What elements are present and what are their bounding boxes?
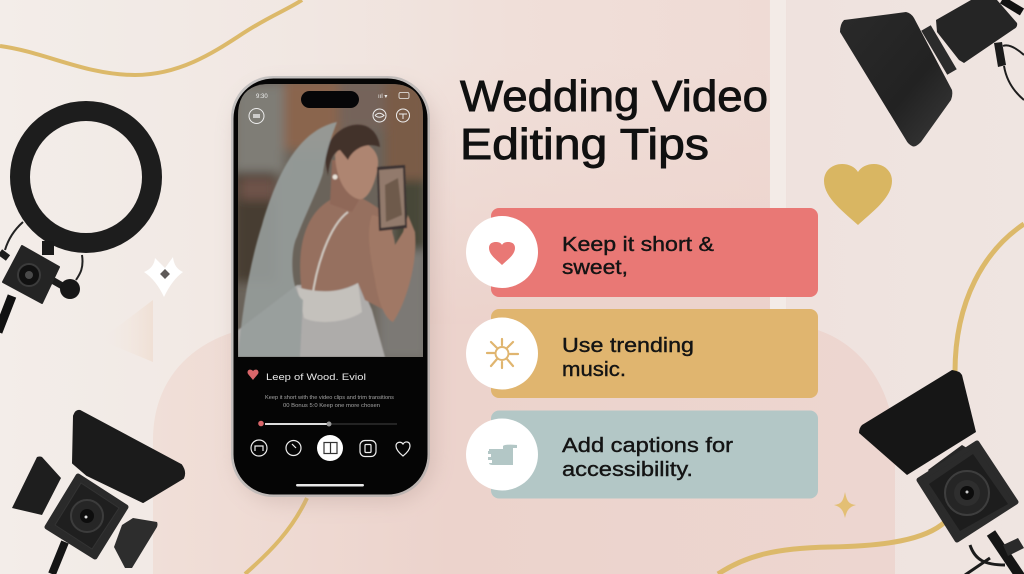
light with barn doors: bottom right [859,370,1024,574]
photo overlay buttons [249,108,410,124]
gold curve: bottom center [245,498,307,574]
phone body [231,76,430,497]
veil [238,122,337,357]
tip text [562,434,733,481]
lace bodice [297,283,362,322]
tip text: Use trending [562,334,694,357]
ring light [0,111,152,332]
light with barn doors: bottom left [12,411,184,574]
home indicator [296,484,364,486]
dress skirt [238,283,385,357]
progress bar [258,421,397,426]
app caption: 00 Bonus 5:0 Keep one more chosen [283,403,380,409]
app caption [248,370,395,409]
tip 1: keep it short [466,208,818,297]
phone [231,76,434,502]
icon: gold heart [824,164,892,225]
title: Wedding Video [460,72,768,121]
status bar [256,92,409,100]
tip text: music. [562,358,626,381]
tip text: Keep it short & [562,233,714,256]
tip text: accessibility. [562,458,693,481]
title [460,72,768,169]
dynamic island [301,91,359,108]
raised arm [369,215,415,322]
tip text: sweet, [562,256,628,279]
dress strap [312,212,348,300]
light with barn doors: top right [840,0,1024,146]
playback controls [251,435,410,461]
gold curve: bottom right [718,522,945,574]
icon: heart [466,216,538,288]
hair [326,125,380,176]
tip 3: captions [466,410,818,498]
back and shoulder [300,190,392,312]
icon: sun [466,318,538,390]
gold curve: top left [0,0,302,75]
app caption: Keep it short with the video clips and trim transitions [265,395,395,401]
icon: hand [466,418,538,490]
title: Editing Tips [460,120,709,169]
phone photo: bride [234,80,428,360]
app caption: Leep of Wood. Eviol [266,372,366,383]
status bar: 9:30 [256,94,268,100]
status bar: ııl ▾ [378,94,387,100]
tip text [562,233,714,279]
tip text [562,334,694,381]
icon: gold star [834,492,856,518]
neck and face [330,160,346,200]
held phone [377,165,407,231]
gold curve: right [955,224,1024,372]
icon: white sparkle [144,257,183,297]
phone shadow [236,86,434,502]
tip 2: trending music [466,309,818,398]
tip text: Add captions for [562,434,733,457]
